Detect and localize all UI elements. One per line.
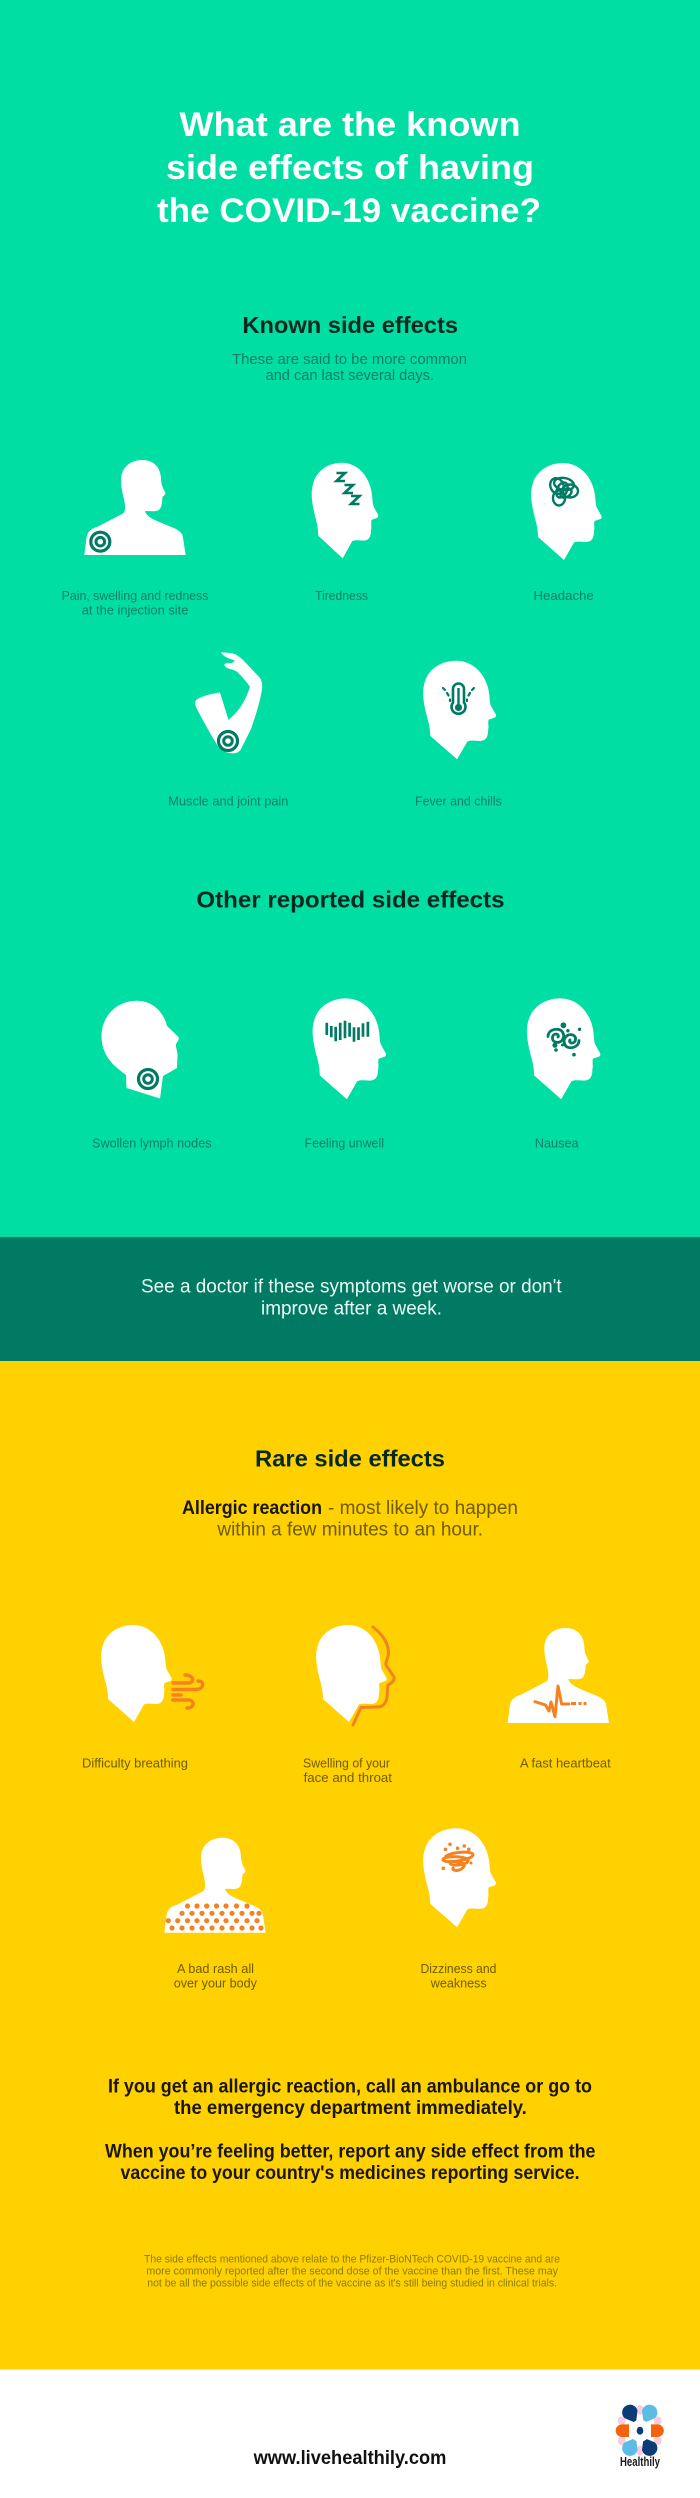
panel: yellow rare side effects	[0, 1361, 700, 2370]
intro: allergic reaction: Allergic reaction	[182, 1498, 322, 1519]
icon: nausea head	[527, 998, 600, 1099]
icon: headache head	[531, 463, 602, 560]
footnote: more commonly reported after the second dose of the vaccine than the first. These may	[146, 2266, 558, 2278]
label: nausea: Nausea	[535, 1135, 579, 1150]
label: fever and chills: Fever and chills	[415, 794, 502, 809]
icon: dizziness head	[423, 1828, 496, 1927]
callout: allergic reaction advice	[105, 2076, 596, 2184]
title: What are the known	[180, 106, 520, 144]
intro text	[232, 351, 467, 384]
icon: swelling head	[316, 1625, 394, 1725]
intro: allergic reaction	[182, 1498, 518, 1541]
panel: see a doctor band: improve after a week.	[261, 1297, 442, 1319]
label: a bad rash: over your body	[174, 1976, 257, 1991]
label: pain swelling: at the injection site	[82, 603, 188, 618]
label: swollen lymph nodes: Swollen lymph nodes	[92, 1135, 212, 1150]
label: a bad rash	[174, 1961, 257, 1991]
icon: shoulder pain bust	[84, 460, 186, 555]
label: dizziness and weakness: weakness	[430, 1976, 487, 1991]
label: pain swelling	[62, 588, 209, 618]
callout: allergic reaction advice: If you get an allergic reaction, call an ambulance or go to	[108, 2076, 592, 2097]
panel: see a doctor band	[0, 1237, 700, 1361]
icon: swollen lymph head	[102, 1001, 179, 1098]
logo: Healthily: Healthily	[620, 2455, 660, 2469]
icon: rash bust	[164, 1838, 266, 1933]
panel: footer	[0, 2370, 700, 2498]
label: difficulty breathing: Difficulty breathing	[82, 1756, 188, 1771]
label: swelling of your face and throat: face and throat	[304, 1770, 392, 1785]
footnote: not be all the possible side effects of the vaccine as it's still being studied in clinical trials.	[147, 2278, 557, 2290]
heading: rare side effects: Rare side effects	[255, 1446, 445, 1472]
icon: fast heartbeat bust	[508, 1628, 609, 1723]
icon: difficulty breathing head	[101, 1625, 203, 1722]
label: headache: Headache	[534, 588, 594, 603]
label: dizziness and weakness: Dizziness and	[420, 1961, 496, 1976]
label: feeling unwell: Feeling unwell	[304, 1135, 384, 1150]
label: swelling of your face and throat	[303, 1756, 392, 1785]
website url: www.livehealthily.com	[253, 2447, 446, 2469]
footnote: The side effects mentioned above relate to the Pfizer-BioNTech COVID-19 vaccine and are	[144, 2254, 560, 2266]
intro: allergic reaction: within a few minutes to an hour.	[216, 1520, 483, 1541]
title: side effects of having	[166, 149, 534, 187]
label: pain swelling: Pain, swelling and redness	[62, 588, 209, 603]
title	[157, 106, 541, 230]
title: the COVID-19 vaccine?	[157, 192, 541, 230]
intro: allergic reaction: - most likely to happen	[328, 1498, 518, 1519]
label: tiredness: Tiredness	[315, 588, 368, 603]
label: muscle and joint pain: Muscle and joint pain	[168, 794, 288, 809]
heading: other reported side effects: Other reported side effects	[196, 887, 504, 913]
icon: arm joint pain	[195, 652, 262, 753]
callout: allergic reaction advice: vaccine to your country's medicines reporting service.	[120, 2163, 580, 2184]
heading: known side effects: Known side effects	[242, 312, 458, 338]
icon: fever head	[423, 661, 496, 759]
label: dizziness and weakness	[420, 1961, 496, 1991]
footnote	[144, 2254, 560, 2290]
intro text: and can last several days.	[266, 367, 434, 384]
label: swelling of your face and throat: Swelling of your	[303, 1756, 391, 1771]
icon: feeling unwell head	[313, 998, 386, 1099]
logo: Healthily	[616, 2402, 664, 2469]
panel: green known side effects	[0, 0, 700, 1237]
panel: see a doctor band: See a doctor if these symptoms get worse or don't	[141, 1276, 562, 1298]
callout: allergic reaction advice: When you’re feeling better, report any side effect from the	[105, 2141, 596, 2162]
icon: tiredness head	[312, 463, 378, 558]
intro text: These are said to be more common	[232, 351, 467, 368]
label: a fast heartbeat: A fast heartbeat	[520, 1756, 611, 1771]
label: a bad rash: A bad rash all	[177, 1961, 254, 1976]
callout: allergic reaction advice: the emergency department immediately.	[174, 2098, 527, 2119]
